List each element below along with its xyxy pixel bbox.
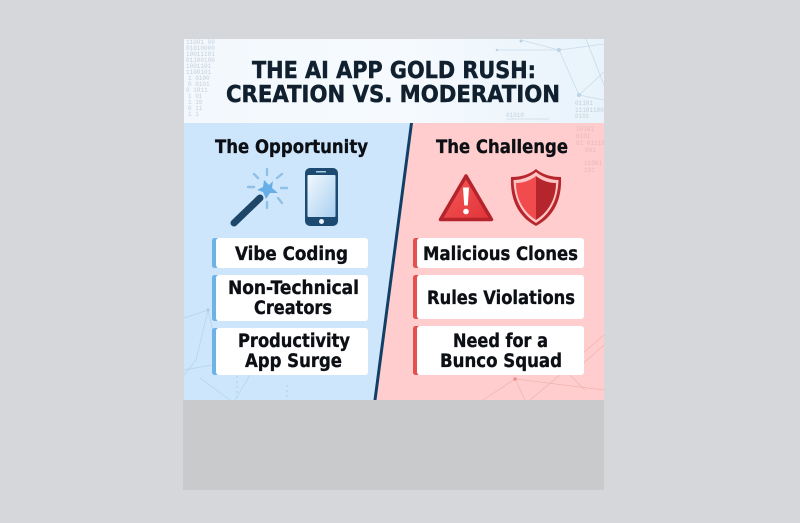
icon: smartphone [305, 168, 338, 226]
card: non-technical creators: Creators [254, 298, 332, 319]
header band: 0 0101 [188, 81, 210, 88]
header band: 11001 00 [186, 39, 215, 46]
card: productivity app surge: App Surge [245, 351, 342, 372]
header band: 1 01 [188, 93, 203, 100]
card: rules violations: Rules Violations [427, 288, 575, 309]
heading: the opportunity: The Opportunity [215, 136, 369, 158]
card: vibe coding [212, 238, 368, 268]
card: malicious clones: Malicious Clones [423, 244, 578, 265]
header band: 0 11 [188, 105, 203, 112]
panel: challenge: 101 [584, 167, 595, 174]
header band: 1 1 [188, 111, 199, 118]
header band: 0 1011 [186, 87, 208, 94]
card: productivity app surge [212, 328, 368, 375]
icon: shield [511, 169, 561, 226]
panel: opportunity [184, 123, 411, 400]
card: vibe coding: Vibe Coding [235, 244, 348, 265]
panel: challenge: 11001 [584, 160, 602, 167]
icon: warning triangle [440, 176, 492, 220]
panel: challenge: 001 [585, 147, 596, 154]
card: malicious clones [413, 238, 584, 268]
header band: 1100101 [186, 69, 212, 76]
diagonal divider [374, 123, 413, 400]
card: need for a bunco squad: Bunco Squad [440, 351, 562, 372]
header band: 1 0100 [188, 75, 210, 82]
header band: 0101 [575, 113, 590, 120]
empty lower grey band [183, 400, 604, 490]
panel: challenge: 0101 [576, 133, 591, 140]
title [226, 58, 560, 108]
card: need for a bunco squad: Need for a [453, 331, 548, 352]
panel: challenge: 10101 [576, 126, 594, 133]
header band: 1001101 [186, 63, 212, 70]
card: rules violations [413, 275, 584, 319]
heading: the challenge: The Challenge [436, 136, 568, 158]
icon: magic wand [234, 169, 287, 223]
header band: 01010 [506, 112, 524, 119]
title: THE AI APP GOLD RUSH: [252, 58, 536, 84]
header band [184, 39, 604, 124]
header band: 10011101 [186, 51, 215, 58]
header band: 11101100 [575, 107, 604, 114]
header band: 1 10 [188, 99, 203, 106]
card: non-technical creators: Non-Technical [228, 278, 359, 299]
panel: challenge [375, 123, 605, 400]
card: productivity app surge: Productivity [238, 331, 350, 352]
card: need for a bunco squad [413, 326, 584, 375]
header band: 01100100 [186, 57, 215, 64]
header band: 01101 [575, 100, 593, 107]
panel: challenge: 01 01110 [576, 140, 605, 147]
card: non-technical creators [212, 275, 368, 321]
header band: 01010000 [186, 45, 215, 52]
title: CREATION VS. MODERATION [226, 82, 560, 108]
